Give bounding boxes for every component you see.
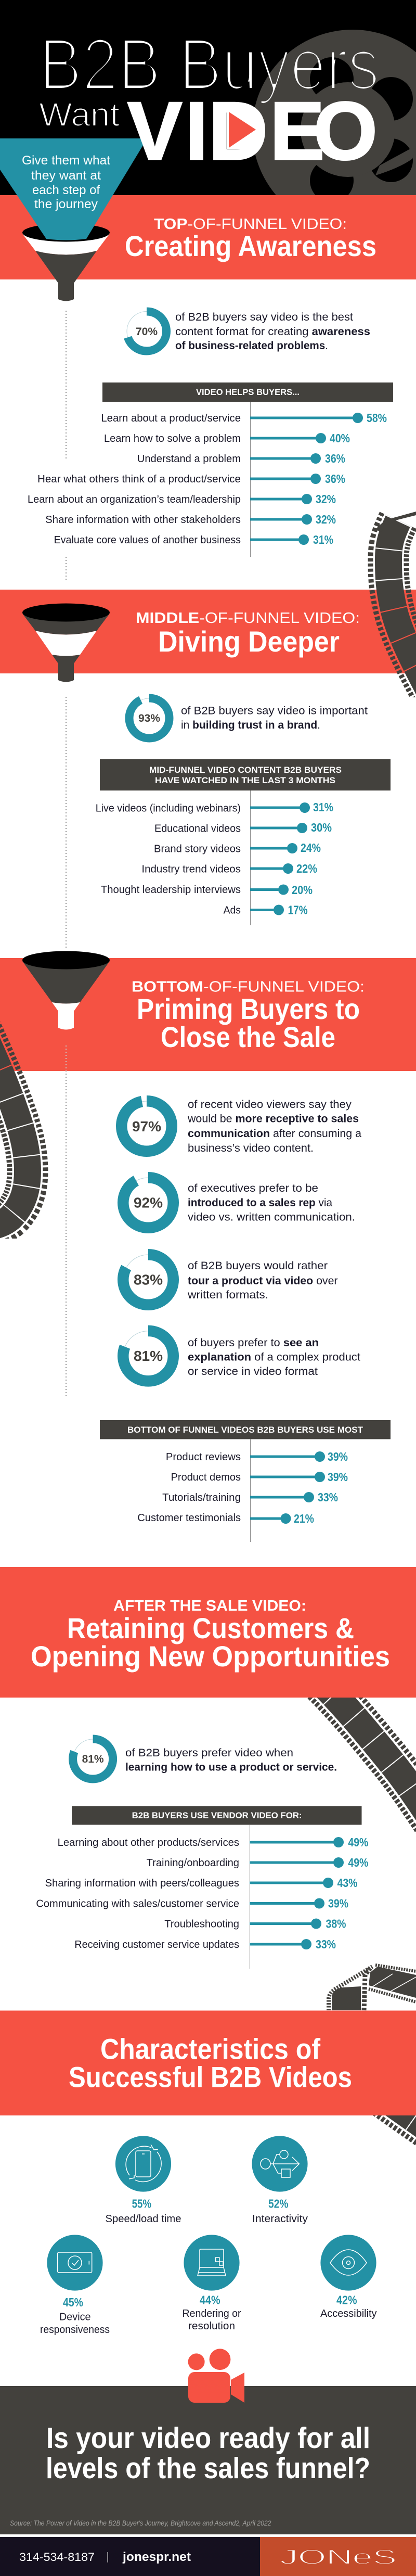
row: 30% [311,821,332,834]
row: Learn about an organization’s team/leadership [28,494,241,505]
stat: 97%: would be more receptive to sales [187,1113,359,1125]
row [54,533,333,546]
stat: 83%: written formats. [187,1289,268,1301]
row: 39% [328,1470,348,1484]
chart heading: bottom funnel [100,1420,391,1439]
row: Learning about other products/services [58,1837,239,1848]
chart heading: vendor video: B2B BUYERS USE VENDOR VIDEO FOR: [132,1810,302,1820]
source: Source: The Power of Video in the B2B Buyer's Journey, Brightcove and Ascend2, April 2022 [10,2519,271,2527]
row: Evaluate core values of another business [54,534,241,546]
row: 49% [348,1835,368,1849]
footer logo: JONeS [280,2546,397,2569]
chart heading: mid funnel: MID-FUNNEL VIDEO CONTENT B2B BUYERS [149,765,342,775]
row: Understand a problem [137,453,241,465]
row: Sharing information with peers/colleagues [45,1878,239,1889]
row [74,1937,336,1951]
chart: mid funnel [96,790,333,925]
stat: 93% [129,698,368,738]
stat: 70%: of B2B buyers say video is the best [175,311,353,323]
row: Learn how to solve a problem [104,433,241,444]
icon: video camera [188,2349,244,2403]
section banner: bottom of funnel [0,958,416,1071]
chart heading: bottom funnel: BOTTOM OF FUNNEL VIDEOS B2B BUYERS USE MOST [127,1425,363,1435]
characteristic: interactivity: Interactivity [252,2213,308,2225]
row [147,1856,368,1869]
stat: 70% [127,311,370,352]
row: 38% [326,1917,346,1931]
row: Learn about a product/service [101,413,241,424]
row: 32% [316,492,336,506]
redrawn dotted segment over banner [66,1045,67,1071]
stat: 81%: explanation of a complex product [188,1351,360,1363]
row: Troubleshooting [164,1918,239,1930]
characteristic: speed: 55% [132,2197,151,2211]
film strip: left [0,1021,48,1239]
stat: 92%: video vs. written communication. [188,1212,355,1223]
row [101,883,313,897]
row: Communicating with sales/customer service [36,1898,239,1910]
row: 20% [292,883,313,897]
chart heading: vendor video [72,1806,362,1825]
chart: video helps buyers [28,402,387,557]
row [96,800,333,814]
stat: 81%: of buyers prefer to see an [188,1337,319,1349]
row: 39% [328,1896,348,1910]
heading: top of funnel: TOP-OF-FUNNEL VIDEO: [154,216,347,233]
section banner: after the sale [0,1567,416,1698]
characteristic: device: Device [59,2312,90,2323]
row: 58% [367,411,387,425]
stat: 92%: introduced to a sales rep via [188,1197,332,1209]
row: Educational videos [154,823,241,835]
icon: phone refresh [126,2145,161,2182]
stat: 70%: of business-related problems. [175,340,328,352]
stat: 97%: of recent video viewers say they [188,1099,352,1111]
heading: bottom of funnel: Close the Sale [161,1021,335,1053]
stat: 83% [123,1255,338,1305]
row: Training/onboarding [147,1857,239,1869]
row: 24% [301,841,321,855]
section banner: middle of funnel [0,590,416,673]
stat: 97% [122,1099,361,1154]
characteristic: rendering: 44% [200,2293,220,2306]
heading: top of funnel [125,216,376,262]
row [101,411,387,425]
row [28,492,336,506]
dotted line [66,311,67,1397]
characteristic: speed: Speed/load time [105,2213,181,2225]
heading: after the sale: Opening New Opportunities [31,1640,390,1673]
characteristic: interactivity [252,2136,308,2225]
stat: 70%: 70% [136,326,158,338]
chart heading: video helps buyers [102,382,393,402]
stat: 92%: of executives prefer to be [188,1182,318,1194]
title: Want: Want [39,96,120,133]
row: 40% [330,431,350,445]
heading: characteristics: Successful B2B Videos [69,2061,352,2094]
section banner: characteristics [0,2011,416,2115]
heading: bottom of funnel [132,978,365,1053]
stat: 81% learning: learning how to use a product or service. [125,1761,337,1774]
heading: middle of funnel [136,610,360,658]
row: 49% [348,1856,368,1869]
heading: after the sale: Retaining Customers & [67,1612,354,1644]
funnel callout text: Give them what [22,154,110,168]
stat: 97%: communication after consuming a [188,1128,361,1140]
row [154,841,321,855]
stat: 83%: tour a product via video over [188,1275,338,1287]
row [154,821,332,835]
section banner: top of funnel [0,195,416,279]
footer logo [260,2537,416,2576]
row: 33% [316,1937,336,1951]
chart heading: video helps buyers: VIDEO HELPS BUYERS... [196,387,300,397]
row: Product demos [171,1472,241,1483]
funnel: top [0,138,147,301]
stat: 92% [123,1178,355,1228]
row: Share information with other stakeholders [45,514,241,526]
heading: middle of funnel: MIDDLE -OF-FUNNEL VIDEO: [136,610,360,627]
characteristic: speed [105,2136,181,2225]
row: 32% [316,513,336,526]
row: 33% [318,1490,338,1504]
row [166,1450,348,1463]
footer contact: jonespr.net [122,2550,191,2564]
heading: after the sale [31,1598,390,1673]
header panel [0,0,416,195]
row: Product reviews [166,1451,241,1463]
heading: bottom of funnel: BOTTOM -OF-FUNNEL VIDEO: [132,978,365,995]
stat: 93%: of B2B buyers say video is important [181,705,368,717]
stat: 70%: content format for creating awareness [175,326,370,338]
characteristic: accessibility: Accessibility [320,2308,376,2319]
stat: 81% [123,1331,360,1381]
row: Thought leadership interviews [101,884,241,896]
funnel: middle [22,604,110,682]
stat: 97%: 97% [132,1118,161,1134]
funnel: bottom [22,951,110,1029]
characteristic: device: responsiveness [40,2324,110,2336]
row [45,513,336,526]
call to action panel [0,2386,416,2534]
row [162,1490,338,1504]
row: 39% [328,1450,348,1463]
row: 31% [313,533,333,546]
film strip: right [368,512,416,697]
call to action text: Is your video ready for all [46,2421,370,2455]
row [141,862,317,875]
row [45,1876,357,1890]
row: Receiving customer service updates [74,1939,239,1950]
row: Customer testimonials [137,1512,241,1524]
funnel callout text [22,154,110,211]
characteristic: interactivity: 52% [268,2197,288,2211]
row [224,903,308,917]
chart heading: mid funnel: HAVE WATCHED IN THE LAST 3 MONTHS [155,775,335,785]
characteristic: device: 45% [63,2296,83,2309]
heading: characteristics: Characteristics of [100,2033,320,2065]
row [137,452,345,465]
row [58,1835,368,1849]
stat: 81% learning: of B2B buyers prefer video when [125,1747,293,1759]
stat: 83%: 83% [134,1272,163,1287]
funnel callout text: they want at [31,169,101,183]
heading: bottom of funnel: Priming Buyers to [137,992,360,1025]
funnel callout text: each step of [32,183,100,197]
row: Hear what others think of a product/service [37,474,241,485]
call to action text: levels of the sales funnel? [46,2452,370,2485]
icon: laptop [198,2249,226,2276]
film strip: lower right [373,2115,416,2145]
stat: 83%: of B2B buyers would rather [188,1260,328,1272]
row [37,472,345,486]
row [104,431,350,445]
row: 43% [337,1876,358,1890]
row: Tutorials/training [162,1492,241,1503]
row: 22% [296,862,317,875]
chart: bottom funnel [137,1439,348,1542]
heading: middle of funnel: Diving Deeper [158,625,340,658]
characteristic: rendering: resolution [188,2320,235,2332]
row: 17% [288,903,308,917]
row: Brand story videos [154,843,241,855]
title: B2B Buyers: B2B Buyers [39,23,380,105]
footer contact [0,2537,260,2576]
stat: 81% learning [73,1739,337,1779]
title: VIDEO: VIDEO [127,85,378,177]
characteristic: device [40,2235,110,2336]
funnel callout text: the journey [34,197,98,211]
stat: 81%: 81% [134,1348,163,1364]
stat: 93%: 93% [138,712,160,724]
heading: top of funnel: Creating Awareness [125,229,376,262]
heading: after the sale: AFTER THE SALE VIDEO: [113,1598,306,1614]
row [171,1470,348,1484]
icon: flow [261,2150,299,2177]
icon: film reel [244,30,416,231]
stat: 92%: 92% [134,1195,163,1210]
call to action text [46,2421,370,2485]
row [164,1917,346,1931]
row [36,1896,348,1910]
row [137,1512,314,1525]
icon: tablet check [58,2252,92,2273]
chart: vendor video [36,1825,368,1969]
characteristic: rendering: Rendering or [182,2308,241,2319]
icon: eye [330,2250,367,2275]
row: 31% [313,800,333,814]
row: 36% [325,472,345,486]
characteristic: rendering [182,2235,241,2332]
film strip: loop [329,1965,416,2010]
chart heading: mid funnel [100,759,391,790]
stat: 81% learning: 81% [82,1753,104,1765]
row: Ads [224,904,241,916]
stat: 81%: or service in video format [188,1366,318,1378]
stat: 97%: business’s video content. [188,1142,314,1154]
characteristic: accessibility: 42% [336,2293,357,2306]
row: 21% [294,1512,314,1525]
stat: 93%: in building trust in a brand. [181,719,320,731]
row: 36% [325,452,345,465]
row: Industry trend videos [141,864,241,875]
row: Live videos (including webinars) [96,802,241,814]
heading: characteristics [69,2033,352,2094]
characteristic: accessibility [320,2235,376,2319]
film strip: diagonal [308,1698,416,1834]
footer contact: 314-534-8187 [19,2551,95,2564]
